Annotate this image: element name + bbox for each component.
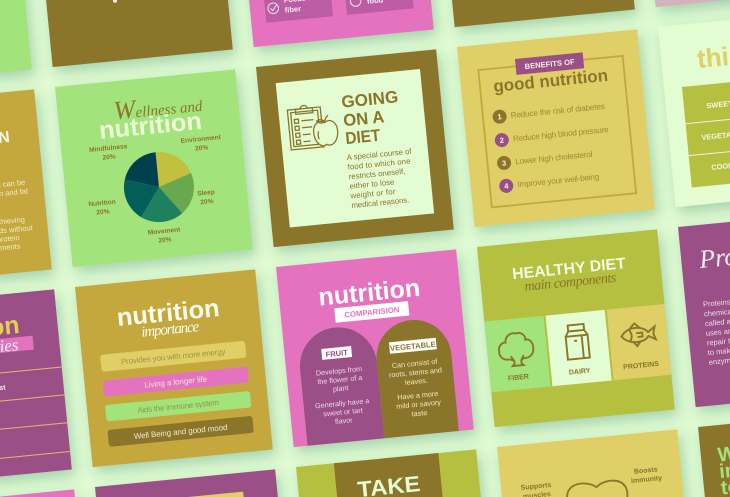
labels: Supports <box>520 482 552 492</box>
numbered list: 1 <box>497 112 502 122</box>
heading: nutrition: nutrition <box>98 107 203 145</box>
tile: proteins: PROTEINS <box>623 361 660 371</box>
heading <box>717 436 730 497</box>
arch: fruit: Develops from <box>315 364 362 378</box>
numbered list: Improve your well-being <box>517 172 600 189</box>
pie labels: Sleep <box>197 189 215 198</box>
body text <box>0 177 36 257</box>
body text <box>345 147 417 210</box>
numbered list: 4 <box>504 181 510 191</box>
panel: wellness and nutrition pie chart <box>55 69 253 267</box>
pie labels: 20% <box>96 208 110 217</box>
arch: fruit: plant <box>332 383 349 394</box>
heading: HEALTHY DIET <box>511 255 627 283</box>
body text: food to which one <box>347 157 411 172</box>
bar: energy <box>100 341 247 372</box>
panel: benefits of good nutrition <box>457 29 655 227</box>
body text: either to lose <box>349 177 395 191</box>
numbered list: Reduce high blood pressure <box>513 125 609 143</box>
arch: fruit: sweet or tart <box>323 406 363 418</box>
panel: healthy diet main components <box>477 229 675 427</box>
card: top pale pink <box>638 0 730 7</box>
card: top pink tips <box>236 0 434 47</box>
labels <box>520 466 663 497</box>
panel: things list <box>658 9 730 207</box>
tile: fiber: FIBER <box>508 374 529 383</box>
numbered list <box>492 99 614 194</box>
pie labels: 20% <box>200 198 214 206</box>
tag: benefits of: BENEFITS OF <box>524 57 575 71</box>
tip: focus on fiber: fiber <box>284 4 302 15</box>
tile: dairy <box>546 310 612 386</box>
arch: fruit: the flower of a <box>317 373 363 386</box>
pie labels <box>83 134 231 251</box>
bar: energy: Provides you with more energy <box>121 347 226 366</box>
pie labels: 20% <box>195 144 209 153</box>
heading: good nutrition: good nutrition <box>493 66 609 96</box>
body text: medical reasons. <box>351 195 410 210</box>
pink highlight <box>0 336 34 360</box>
arch: fruit <box>296 324 384 446</box>
body text <box>703 294 730 367</box>
bar: longer life: Living a longer life <box>144 375 208 390</box>
tag: comparision: COMPARISION <box>344 305 400 320</box>
card: take <box>296 449 484 497</box>
heading: nutrition: nutrition <box>116 294 221 332</box>
panel: nutrition comparison <box>276 249 474 447</box>
arch: vegetable: VEGETABLE <box>390 340 436 353</box>
icon: clipboard and apple <box>287 102 339 150</box>
card: bottom yellow heart <box>497 429 687 497</box>
arch: fruit: FRUIT <box>325 348 349 359</box>
panel: nutrition importance <box>75 269 273 467</box>
arch: vegetable: Can consist of <box>391 357 438 370</box>
tile: fiber <box>484 316 550 392</box>
card: bottom-left pink <box>0 489 79 497</box>
panel: nutrition studies purple <box>0 289 72 487</box>
body text: A special course of <box>346 147 413 162</box>
tile: proteins <box>607 304 671 380</box>
numbered list: 2 <box>499 136 504 145</box>
pie labels: Movement <box>148 226 181 237</box>
arch: vegetable: leaves. <box>405 376 428 387</box>
bar: immune system: Aids the immune system <box>137 398 220 415</box>
card: bottom purple <box>95 469 281 497</box>
list table <box>682 73 730 187</box>
tip: food <box>343 0 414 15</box>
pie chart <box>121 149 197 225</box>
icon: heart <box>566 479 630 497</box>
tip: focus on fiber <box>262 0 333 23</box>
bar: longer life <box>103 367 249 397</box>
card: bottom-right brown <box>698 409 730 497</box>
labels: immunity <box>631 475 663 485</box>
bar: immune system <box>105 391 251 422</box>
tag: benefits of <box>515 52 584 75</box>
script title: Wellness and <box>112 88 204 125</box>
heading <box>341 87 403 148</box>
heading: GOING <box>341 87 399 112</box>
tag: comparision <box>334 301 409 323</box>
pie labels: 20% <box>102 153 116 162</box>
heading: ON A <box>342 107 385 130</box>
arch: vegetable: roots, stems and <box>389 365 442 379</box>
numbered list: Reduce the risk of diabetes <box>510 102 605 120</box>
script subtitle: main components <box>524 271 617 295</box>
body text: weight or for <box>349 187 396 200</box>
arch: fruit: Generally have a <box>315 396 370 410</box>
arch: vegetable <box>373 316 459 438</box>
pie labels: Nutrition <box>88 199 116 208</box>
labels: Boosts <box>634 466 658 476</box>
card: top-left green <box>0 0 32 87</box>
card: top brown right <box>437 0 635 27</box>
body text: restricts oneself, <box>348 167 406 181</box>
pie labels: Mindfulness <box>89 143 128 154</box>
bar: well being: Well Being and good mood <box>133 423 228 441</box>
heading: nutrition: nutrition <box>317 274 421 312</box>
arch: vegetable: taste <box>411 408 428 418</box>
tile: dairy: DAIRY <box>569 368 591 377</box>
card: gold nutrition text <box>0 89 52 287</box>
script subtitle: importance <box>141 319 200 341</box>
pie labels: Environment <box>180 134 222 145</box>
numbered list: Lower high cholesterol <box>515 150 593 166</box>
arch: vegetable: Have a more <box>397 389 439 402</box>
pie labels: 20% <box>158 236 172 245</box>
bar: well being <box>107 416 254 447</box>
panel: going on a diet <box>256 49 454 247</box>
arch: fruit: flavor <box>335 415 354 426</box>
card: top brown <box>35 0 233 67</box>
numbered list: 3 <box>502 158 507 168</box>
heading: DIET <box>344 126 382 148</box>
panel: protein description <box>678 209 730 407</box>
arch: vegetable: mild or savory <box>396 398 442 411</box>
